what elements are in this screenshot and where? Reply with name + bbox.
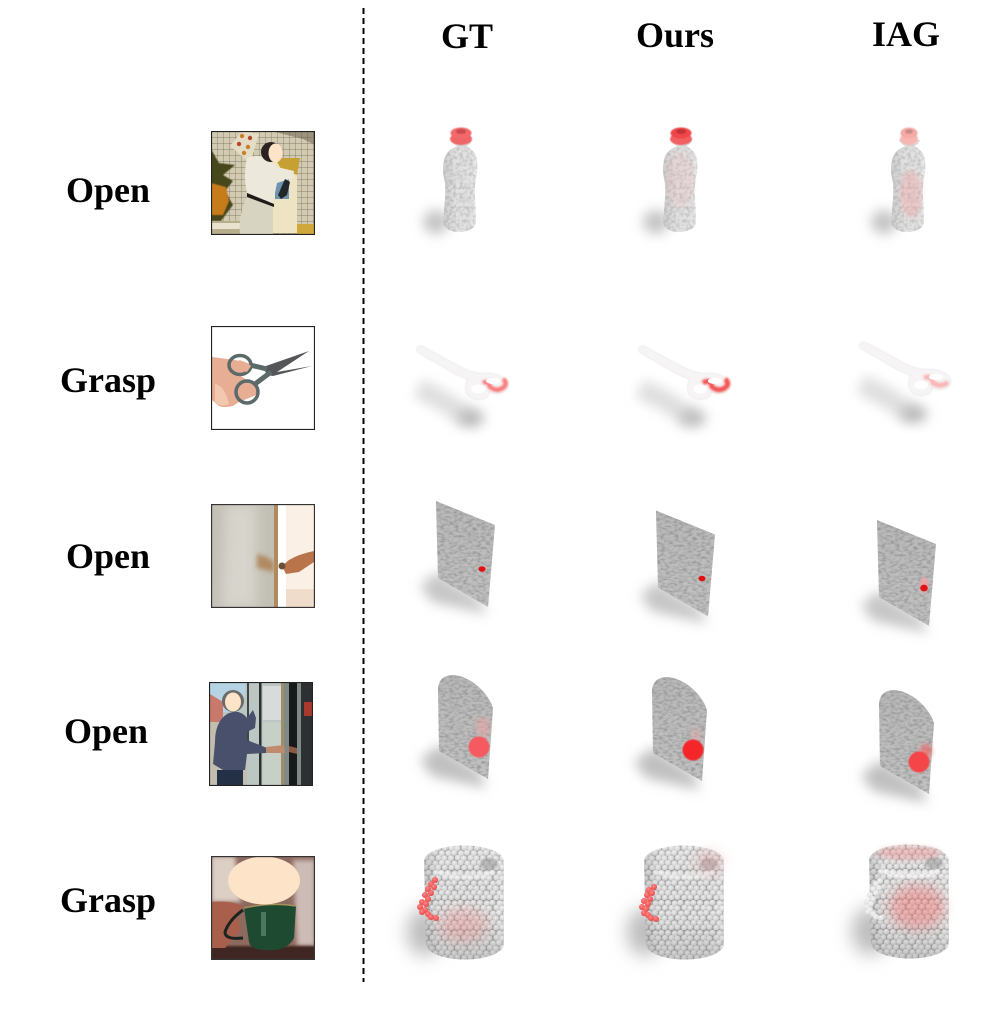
face mask	[225, 692, 241, 712]
mug: GT	[407, 846, 504, 960]
photo: hand opening frosted door	[211, 504, 315, 608]
row label: Open: Open	[66, 170, 150, 210]
column heading: Ours: Ours	[636, 15, 714, 55]
dashed divider	[362, 8, 364, 982]
photo: hand holding scissors	[211, 326, 315, 430]
mug: Ours	[627, 846, 724, 960]
scissors: GT	[417, 346, 507, 427]
mug: IAG	[852, 844, 949, 958]
scissors: IAG	[860, 342, 950, 423]
white handle points	[864, 878, 884, 921]
handle	[682, 740, 704, 760]
arched door: IAG	[861, 690, 934, 803]
door: GT	[420, 501, 495, 614]
red handle points	[417, 877, 439, 921]
column heading: GT: GT	[441, 16, 493, 56]
arched door: Ours	[634, 677, 707, 790]
handle	[920, 577, 928, 593]
row label: Grasp: Grasp	[60, 880, 156, 920]
photo: man opening glass door	[209, 682, 313, 786]
face mask	[268, 144, 282, 162]
red contact region	[703, 379, 728, 390]
column heading: IAG: IAG	[872, 14, 940, 54]
row label: Open: Open	[64, 711, 148, 751]
pink cap	[900, 128, 918, 145]
red cap	[670, 128, 692, 145]
handle	[478, 566, 486, 572]
bottle: Ours	[643, 128, 697, 234]
red handle points	[639, 884, 659, 922]
pink contact region	[924, 377, 948, 385]
bottle: GT	[423, 128, 477, 234]
handle	[908, 752, 930, 772]
photo: man opening bottle	[211, 131, 315, 235]
row label: Open: Open	[66, 536, 150, 576]
scissors: Ours	[639, 346, 729, 427]
red contact region	[483, 379, 506, 390]
handle	[468, 736, 490, 758]
handle	[698, 576, 706, 581]
door: Ours	[640, 510, 715, 624]
photo: hand holding green mug	[211, 856, 315, 960]
door: IAG	[861, 520, 936, 633]
row label: Grasp: Grasp	[60, 360, 156, 400]
face mask	[228, 856, 300, 904]
red cap	[450, 128, 472, 145]
arched door: GT	[420, 675, 493, 788]
bottle: IAG	[871, 128, 925, 234]
